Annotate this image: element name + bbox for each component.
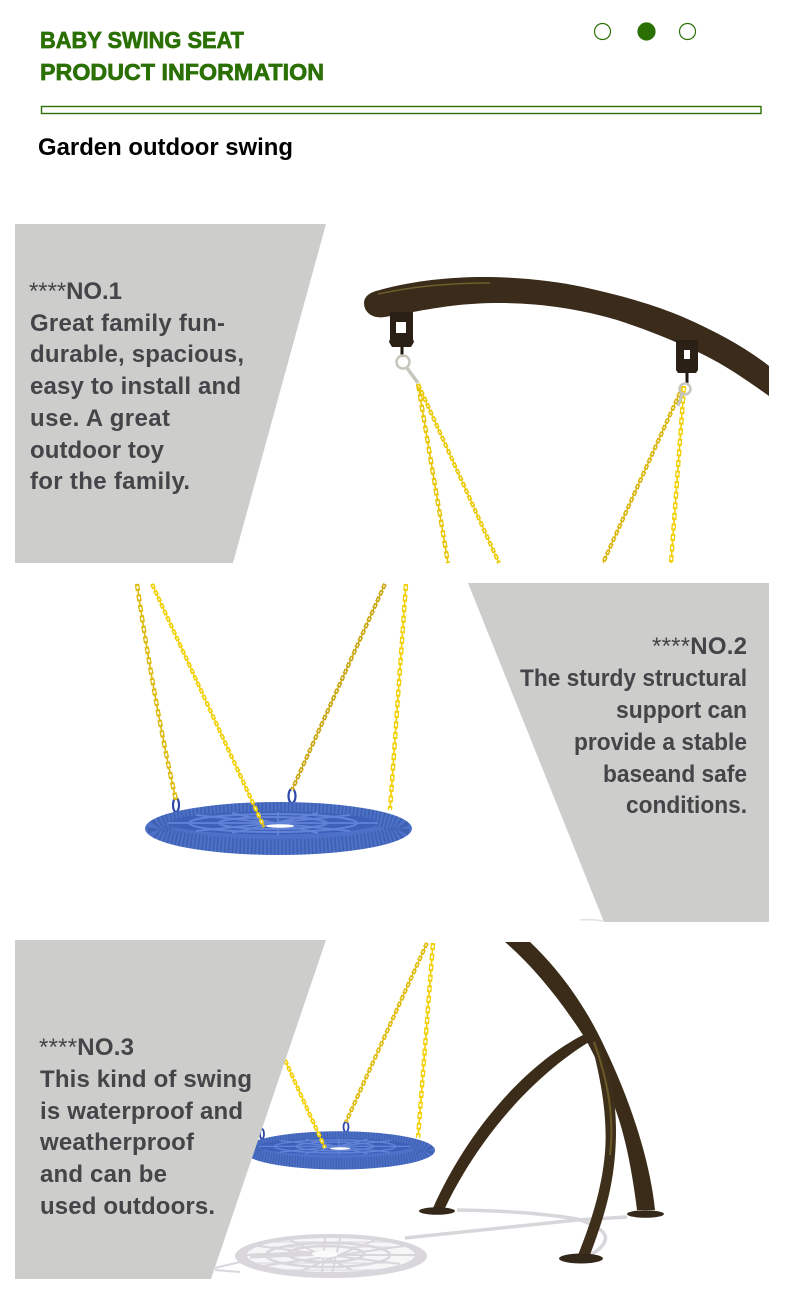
- text: no.2 description: provide a stable: [574, 729, 747, 756]
- panel: no.2: [468, 583, 769, 922]
- rear arch leg: [505, 942, 655, 1210]
- title: PRODUCT INFORMATION: [40, 59, 324, 85]
- text: no.2 description: [520, 633, 747, 819]
- text: no.3 description: This kind of swing: [40, 1066, 252, 1093]
- text: no.1 description: use. A great: [30, 405, 170, 432]
- chain: left diagonal: [418, 384, 499, 563]
- text: no.1 description: for the family.: [30, 468, 190, 495]
- chain: far left: [137, 584, 176, 800]
- arch tube: [364, 277, 769, 396]
- illustration: swing top frame and chains: [364, 277, 769, 563]
- seat: [145, 802, 412, 855]
- text: no.1 description: outdoor toy: [30, 437, 165, 464]
- brackets: [389, 312, 414, 347]
- text: no.1 description: durable, spacious,: [30, 341, 244, 368]
- text: no.2 description: ****NO.2: [652, 633, 747, 660]
- text: no.3 description: used outdoors.: [40, 1193, 215, 1220]
- chain: far right: [390, 584, 406, 810]
- chain: front: [152, 584, 264, 827]
- text: no.3 description: is waterproof and: [40, 1098, 243, 1125]
- text: no.1 description: Great family fun-: [30, 310, 225, 337]
- chain: back small: [346, 943, 427, 1122]
- text: no.2 description: conditions.: [626, 792, 747, 819]
- front leg: [578, 1038, 616, 1255]
- seat small: [243, 1131, 435, 1169]
- title: [40, 27, 324, 85]
- text: no.1 description: [29, 278, 244, 495]
- illustration: swing seat with chains: [137, 584, 412, 855]
- text: no.3 description: weatherproof: [39, 1129, 195, 1156]
- title: BABY SWING SEAT: [40, 27, 245, 53]
- page indicator dots: [594, 23, 696, 40]
- text: no.3 description: and can be: [40, 1161, 167, 1188]
- text: no.1 description: easy to install and: [30, 373, 241, 400]
- text: no.3 description: ****NO.3: [39, 1034, 134, 1061]
- text: no.1 description: ****NO.1: [29, 278, 122, 305]
- text: no.2 description: baseand safe: [603, 761, 747, 788]
- chain: right hanging: [671, 386, 684, 563]
- text: no.2 description: support can: [616, 697, 747, 724]
- left leg: [433, 1035, 589, 1208]
- chain: right small: [418, 943, 433, 1138]
- subtitle: Garden outdoor swing: [38, 134, 293, 161]
- chain: back: [292, 584, 385, 790]
- illustration: swing frame legs, seat and shadow: [215, 942, 664, 1278]
- chain: front small: [285, 1060, 325, 1148]
- text: no.3 description: [39, 1034, 252, 1220]
- text: no.2 description: The sturdy structural: [520, 665, 747, 692]
- ground shadow: [215, 1210, 627, 1278]
- hooks behind seat: [173, 789, 296, 812]
- hooks and rings: [402, 347, 687, 383]
- hooks small: [260, 1122, 348, 1139]
- chain: right diagonal: [603, 386, 683, 563]
- header bar: [42, 106, 761, 114]
- panel: no.3: [15, 940, 326, 1279]
- feet: [419, 1207, 455, 1215]
- panel: no.1: [15, 224, 326, 563]
- chain: left hanging: [418, 384, 448, 563]
